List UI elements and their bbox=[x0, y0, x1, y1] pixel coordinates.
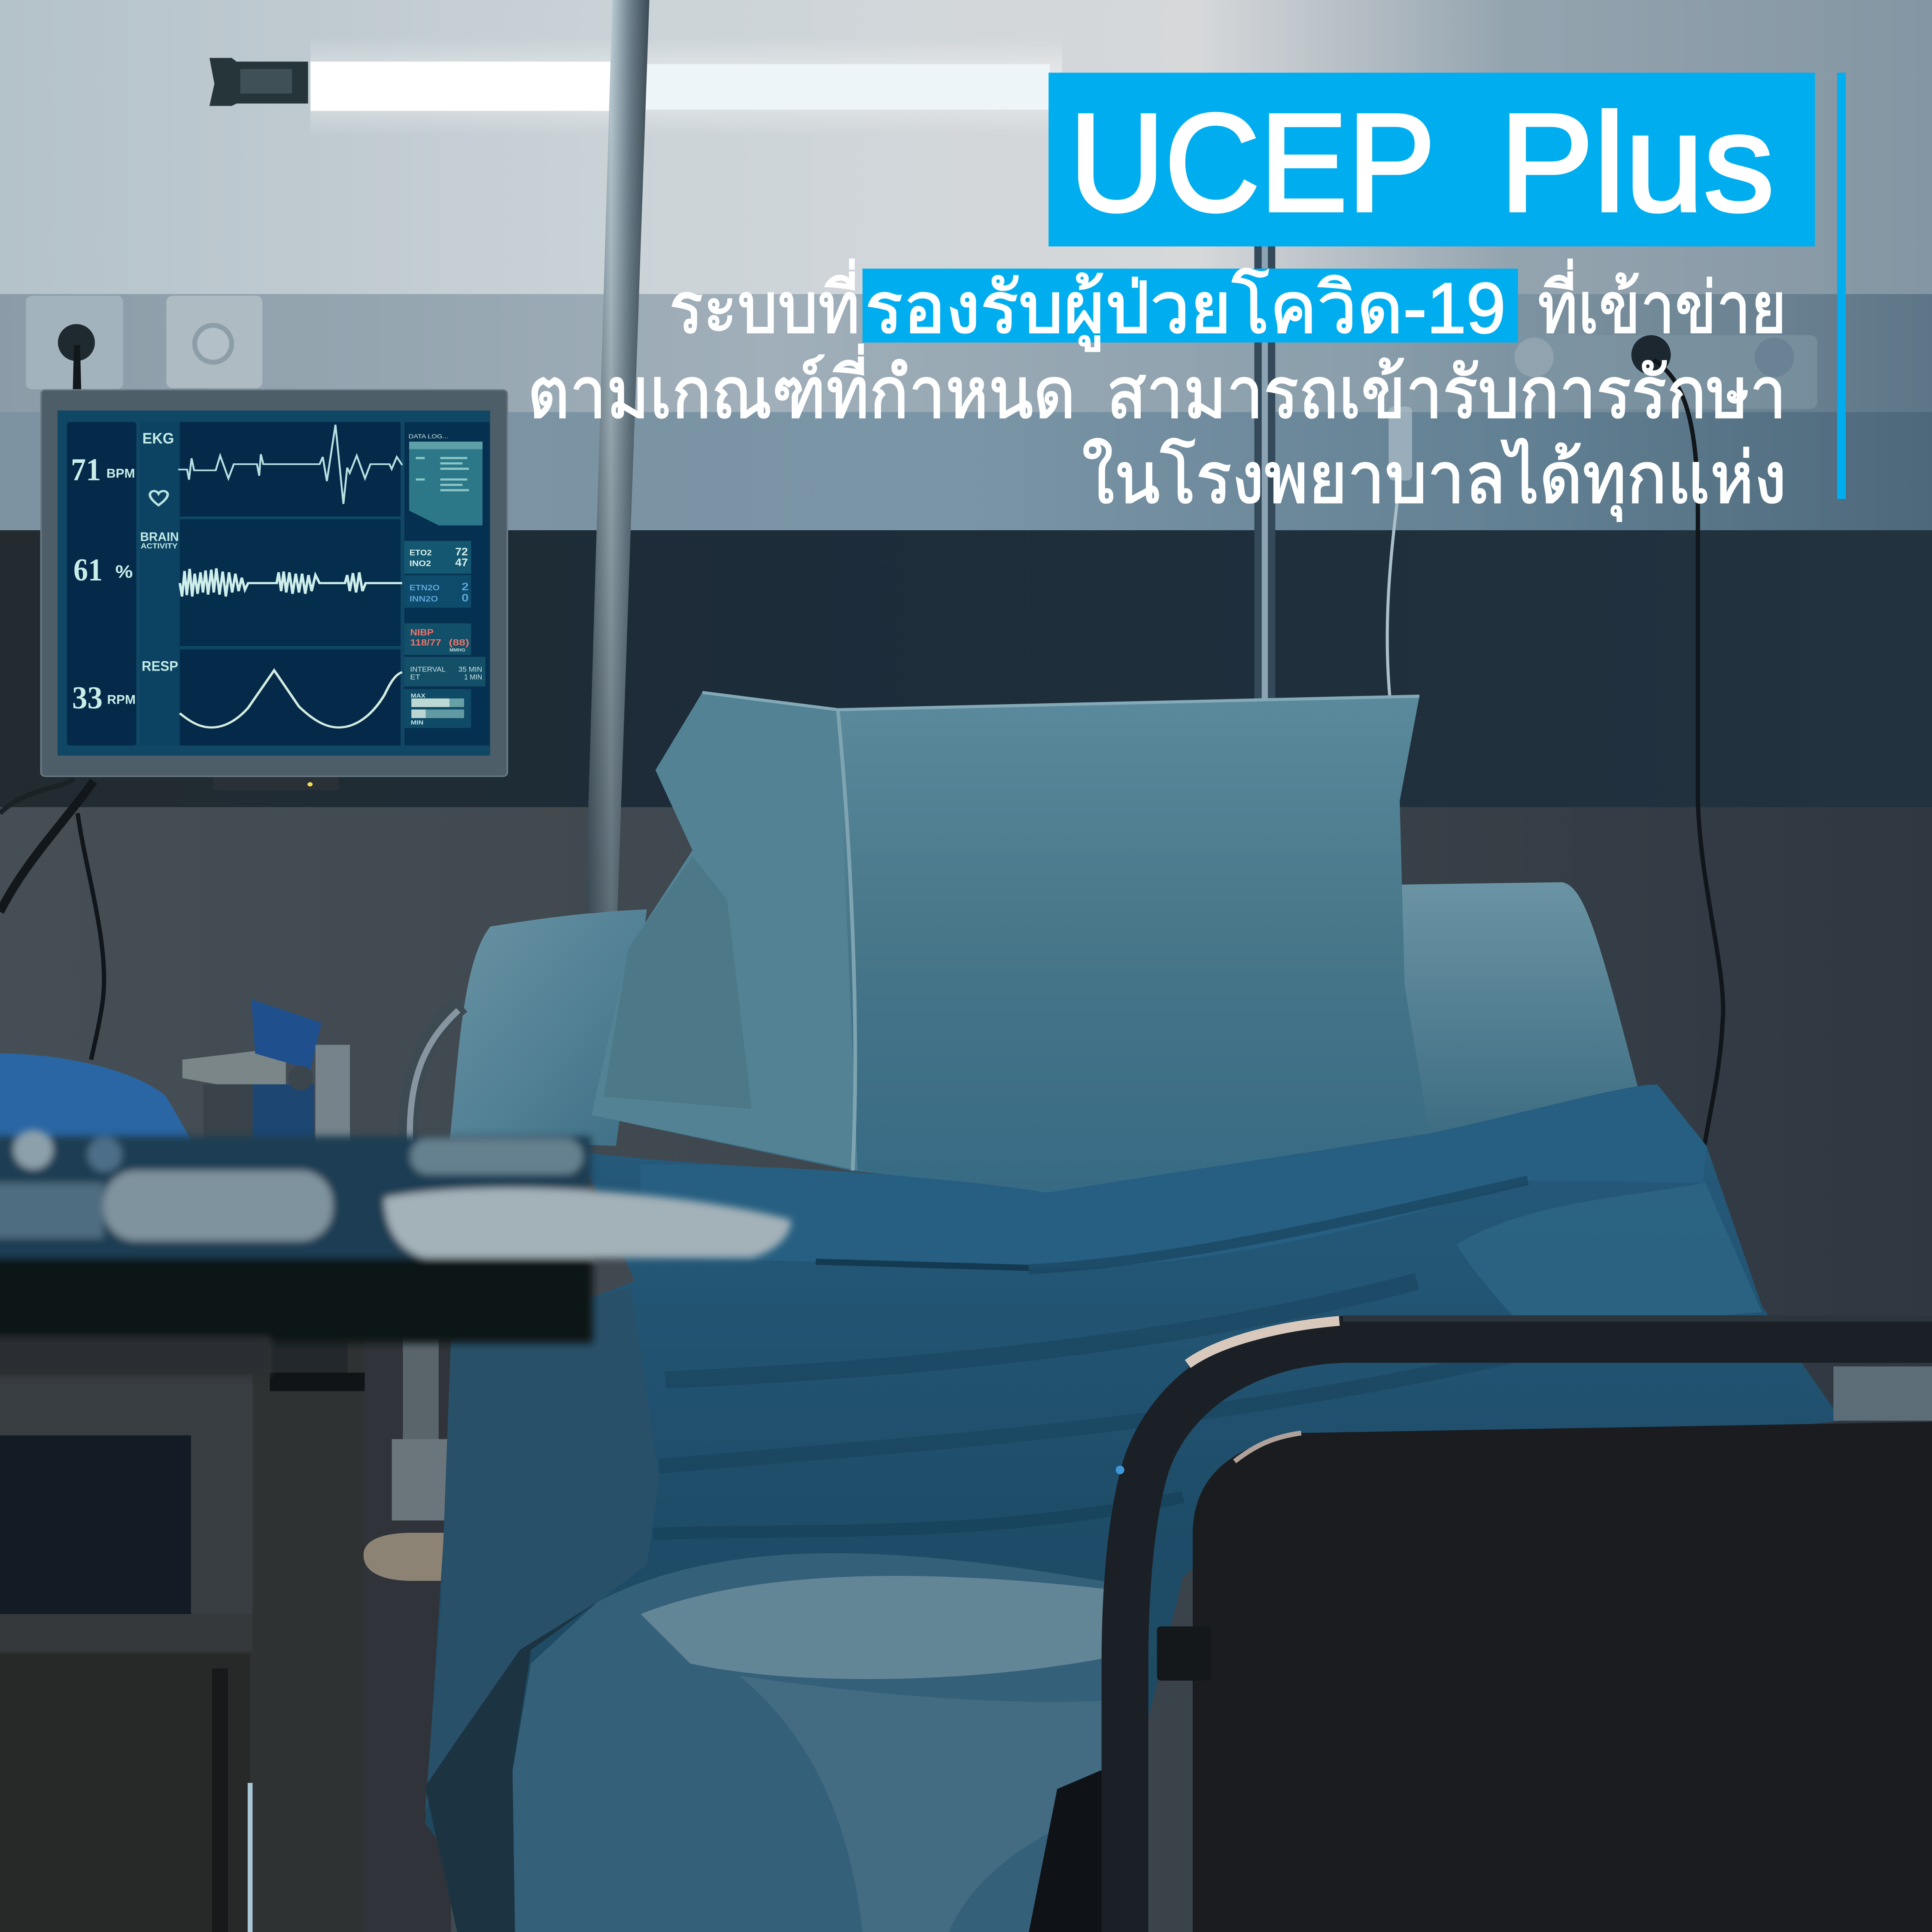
pillow bbox=[592, 693, 1429, 1193]
subtitle bbox=[527, 259, 1786, 522]
ventilation bag bbox=[0, 1054, 191, 1168]
foreground medical equipment bbox=[0, 999, 461, 1168]
wall panel strip bbox=[0, 294, 1932, 414]
title bbox=[1069, 85, 1774, 240]
title: UCEP bbox=[1069, 85, 1435, 240]
channel labels bbox=[140, 430, 179, 674]
gas readouts: 0 bbox=[462, 592, 469, 604]
dark wall band bbox=[0, 530, 1932, 809]
blood pressure readout: (88) bbox=[449, 638, 469, 647]
vital readouts: % bbox=[115, 562, 133, 582]
title background bbox=[1048, 73, 1815, 246]
clamp stand bbox=[182, 1047, 286, 1097]
lower dark wall bbox=[0, 807, 1932, 1932]
interval readout bbox=[404, 657, 486, 687]
monitor screen bbox=[58, 410, 490, 756]
blanket lower section bbox=[513, 1553, 1115, 1932]
level bars: MIN bbox=[411, 720, 423, 726]
IV drip tube bbox=[1387, 407, 1412, 697]
EKG waveform bbox=[178, 425, 402, 504]
blood pressure readout bbox=[404, 623, 471, 655]
channel labels: EKG bbox=[143, 430, 174, 447]
upper wall bbox=[0, 0, 1932, 296]
blurred table top bbox=[0, 1130, 791, 1376]
gas readouts: INN2O bbox=[410, 595, 438, 604]
accent bar bbox=[1837, 73, 1846, 499]
highlight behind subtitle bbox=[863, 269, 1518, 343]
subtitle: รองรับผู้ป่วยโควิด-19 bbox=[865, 268, 1506, 352]
vital readouts: 61 bbox=[73, 553, 103, 587]
floor area beside cabinet bbox=[365, 1337, 451, 1932]
subtitle: ระบบที่ bbox=[669, 259, 860, 348]
gas readouts: ETN2O bbox=[410, 583, 440, 592]
level bars: MAX bbox=[411, 693, 425, 699]
drape shadow bbox=[425, 1602, 598, 1932]
blood pressure readout: MMHG bbox=[450, 647, 465, 653]
bed mattress backrest bbox=[450, 882, 1639, 1146]
vital readouts: 33 bbox=[72, 680, 103, 715]
power cables bbox=[0, 360, 1723, 1148]
brain activity waveform bbox=[180, 568, 402, 596]
gas readouts: 72 bbox=[455, 546, 468, 558]
gas readouts: 47 bbox=[455, 556, 468, 568]
vital readouts: BPM bbox=[106, 466, 135, 480]
subtitle: สามารถเข้ารับการรักษา bbox=[1106, 353, 1786, 433]
vital readouts: 71 bbox=[71, 453, 101, 487]
blanket bbox=[425, 1084, 1842, 1932]
data log card bbox=[409, 433, 483, 526]
foreground IV pole bbox=[585, 0, 649, 912]
vital readouts bbox=[71, 453, 136, 715]
chrome bed handle bbox=[408, 1004, 461, 1152]
blood pressure readout: NIBP bbox=[410, 627, 434, 638]
interval readout: 35 MIN bbox=[459, 665, 482, 673]
blanket right highlight bbox=[1456, 1183, 1762, 1331]
wall light fixture bbox=[210, 37, 1062, 136]
shadow under bed bbox=[1029, 1771, 1146, 1932]
IV pole behind the bed bbox=[1255, 246, 1275, 721]
lower light wall bbox=[0, 412, 1932, 532]
subtitle: ตามเกณฑ์ที่กำหนด bbox=[527, 344, 1075, 433]
footboard and rail bbox=[1116, 1318, 1932, 1932]
rail tube bbox=[1125, 1340, 1932, 1932]
cabinet bbox=[0, 1337, 365, 1932]
level bars bbox=[404, 689, 471, 728]
channel labels: ACTIVITY bbox=[141, 542, 178, 550]
footboard panel bbox=[1193, 1422, 1932, 1932]
monitor frame bbox=[41, 390, 507, 776]
subtitle: ในโรงพยาบาลได้ทุกแห่ง bbox=[1082, 438, 1786, 522]
bed side rail bbox=[364, 1337, 449, 1581]
respiration waveform bbox=[180, 670, 402, 727]
blanket upper fold bbox=[641, 1084, 1707, 1269]
gas readouts: ETO2 bbox=[410, 548, 432, 557]
gas readouts bbox=[404, 541, 471, 608]
patient monitor bbox=[41, 390, 507, 790]
gas readouts: 2 bbox=[462, 580, 469, 592]
subtitle: ที่เข้าข่าย bbox=[1538, 259, 1786, 348]
rail highlights bbox=[1188, 1321, 1340, 1364]
monitor stand bbox=[213, 777, 339, 790]
blanket crease shadows bbox=[653, 1180, 1528, 1534]
pillow flap bbox=[592, 693, 857, 1170]
wall sockets bbox=[26, 296, 1817, 409]
interval readout: 1 MIN bbox=[464, 673, 482, 681]
blanket left drape bbox=[425, 1288, 659, 1811]
channel labels: BRAIN bbox=[140, 529, 179, 544]
channel labels: RESP bbox=[142, 658, 178, 674]
interval readout: INTERVAL bbox=[410, 665, 446, 673]
blood pressure readout: 118/77 bbox=[410, 638, 441, 647]
title: Plus bbox=[1500, 85, 1774, 240]
icon: heart bbox=[150, 491, 168, 505]
interval readout: ET bbox=[410, 673, 420, 681]
rail top highlight bbox=[1343, 1317, 1932, 1319]
gas readouts: INO2 bbox=[410, 559, 431, 568]
vital readouts: RPM bbox=[107, 692, 136, 707]
data log card: DATA LOG... bbox=[409, 433, 448, 440]
heading block bbox=[527, 73, 1846, 522]
